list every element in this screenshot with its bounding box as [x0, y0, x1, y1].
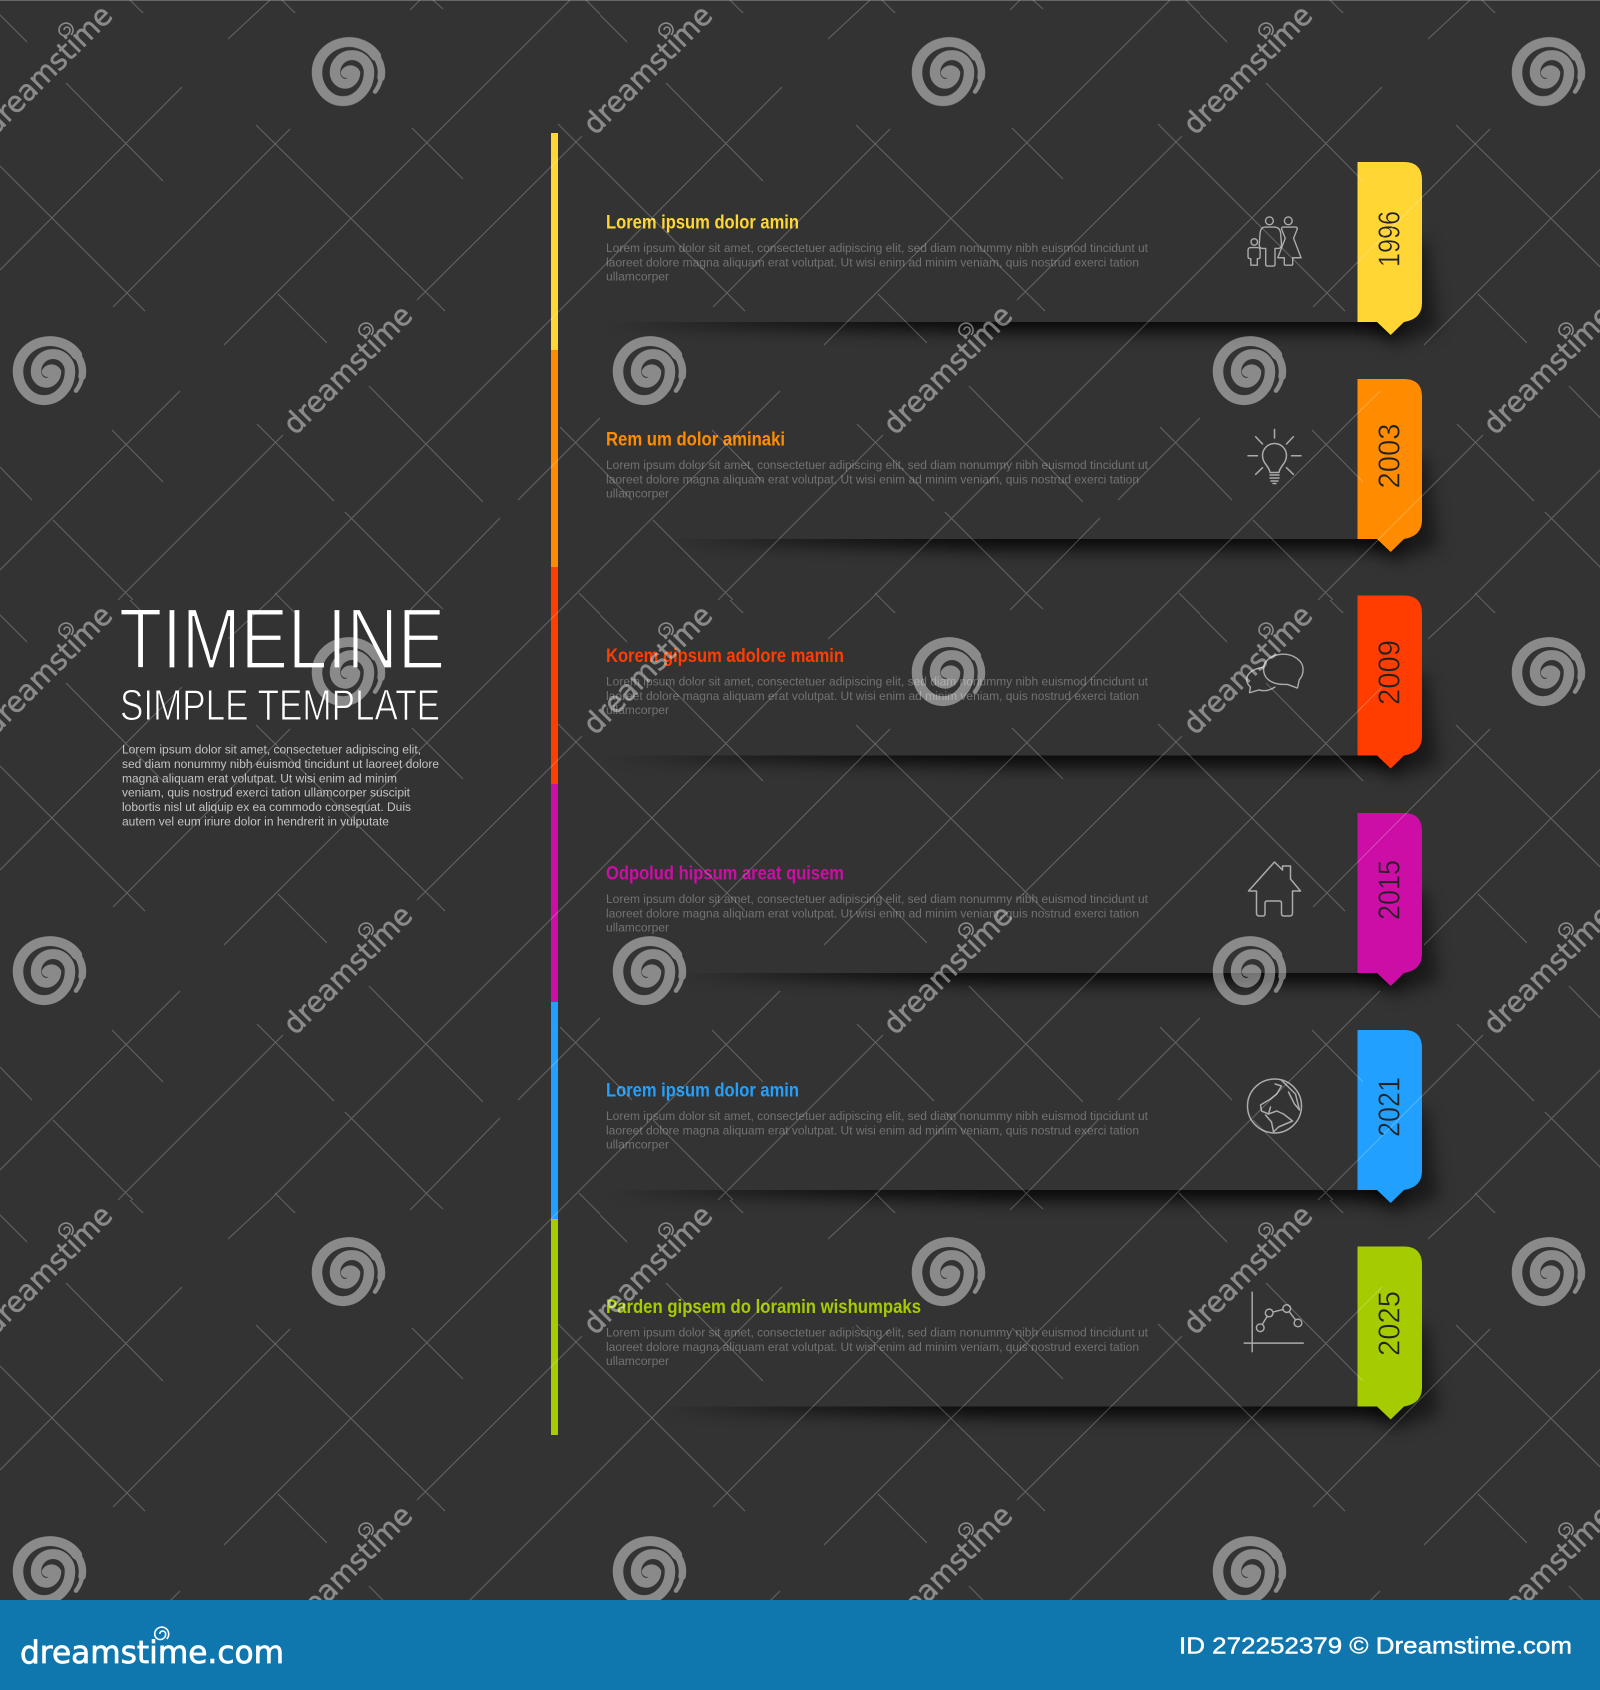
year: 2021: 2021 — [1372, 1077, 1406, 1137]
watermark overlay: dreamstime — [876, 1498, 1019, 1641]
intro text block — [122, 742, 439, 828]
footer logo: dreamstime.com — [20, 1635, 284, 1671]
tab: 2003 — [1358, 379, 1422, 552]
text block: 2009: laoreet dolore magna aliquam erat volutpat. Ut wisi enim ad minim veniam, quis nostrud exerci tation — [606, 689, 1139, 703]
text block: 2003: Lorem ipsum dolor sit amet, consectetuer adipiscing elit, sed diam nonummy nibh euismod tincidunt ut — [606, 458, 1149, 472]
heading: 2003: Rem um dolor aminaki — [606, 430, 785, 450]
year: 1996: 1996 — [1372, 211, 1406, 267]
timeline vertical bar — [551, 133, 558, 1435]
panel: 2003 — [606, 379, 1438, 561]
text block: 2015 — [606, 892, 1149, 935]
text block: 2021: ullamcorper — [606, 1138, 669, 1152]
watermark overlay: dreamstime — [876, 298, 1019, 441]
text block: 2009: Lorem ipsum dolor sit amet, consectetuer adipiscing elit, sed diam nonummy nibh euismod tincidunt ut — [606, 674, 1149, 688]
text block: 2025: laoreet dolore magna aliquam erat volutpat. Ut wisi enim ad minim veniam, quis nostrud exerci tation — [606, 1340, 1139, 1354]
text block: 2009: ullamcorper — [606, 703, 669, 717]
text block: 2015: Lorem ipsum dolor sit amet, consectetuer adipiscing elit, sed diam nonummy nibh euismod tincidunt ut — [606, 892, 1149, 906]
text block: 1996 — [606, 241, 1149, 284]
year: 2025: 2025 — [1372, 1291, 1406, 1356]
year: 2009: 2009 — [1372, 640, 1406, 705]
intro text block: sed diam nonummy nibh euismod tincidunt ut laoreet dolore — [122, 757, 439, 771]
icon: globe — [1248, 1079, 1302, 1133]
watermark overlay: dreamstime — [576, 598, 719, 741]
tab: 2015 — [1358, 813, 1422, 986]
icon: line chart — [1244, 1292, 1303, 1352]
title: TIMELINE — [119, 592, 445, 688]
text block: 2025: Lorem ipsum dolor sit amet, consectetuer adipiscing elit, sed diam nonummy nibh euismod tincidunt ut — [606, 1326, 1149, 1340]
subtitle: SIMPLE TEMPLATE — [120, 682, 440, 730]
text block: 2015: ullamcorper — [606, 921, 669, 935]
panel: 1996 — [606, 162, 1438, 344]
icon: family — [1248, 217, 1301, 266]
footer bar — [0, 1600, 1600, 1690]
panel: 2015 — [606, 813, 1438, 995]
text block: 2021: Lorem ipsum dolor sit amet, consectetuer adipiscing elit, sed diam nonummy nibh euismod tincidunt ut — [606, 1109, 1149, 1123]
tab: 2021 — [1358, 1030, 1422, 1203]
text block: 2003: laoreet dolore magna aliquam erat volutpat. Ut wisi enim ad minim veniam, quis nostrud exerci tation — [606, 472, 1139, 486]
watermark overlay: dreamstime — [876, 898, 1019, 1041]
watermark overlay: dreamstime — [276, 898, 419, 1041]
text block: 2003: ullamcorper — [606, 487, 669, 501]
icon: light bulb — [1248, 430, 1301, 484]
watermark overlay: dreamstime — [276, 298, 419, 441]
text block: 2025 — [606, 1326, 1149, 1368]
watermark overlay: dreamstime — [1176, 1198, 1319, 1341]
panel: 2009 — [606, 596, 1438, 778]
panel: 2021 — [606, 1030, 1438, 1212]
intro text block: lobortis nisl ut aliquip ex ea commodo consequat. Duis — [122, 800, 411, 814]
tab: 1996 — [1358, 162, 1422, 335]
watermark overlay: dreamstime — [1176, 598, 1319, 741]
year: 2003: 2003 — [1372, 424, 1406, 488]
icon: house — [1248, 862, 1300, 916]
text block: 2009 — [606, 674, 1149, 717]
text block: 2025: ullamcorper — [606, 1354, 669, 1368]
year: 2015: 2015 — [1372, 860, 1406, 920]
text block: 1996: laoreet dolore magna aliquam erat volutpat. Ut wisi enim ad minim veniam, quis nostrud exerci tation — [606, 255, 1139, 269]
panel: 2025 — [606, 1246, 1438, 1428]
intro text block: Lorem ipsum dolor sit amet, consectetuer adipiscing elit, — [122, 742, 421, 756]
watermark overlay: dreamstime — [576, 1198, 719, 1341]
heading: 2025: Parden gipsem do loramin wishumpaks — [606, 1297, 921, 1318]
intro text block: veniam, quis nostrud exerci tation ullamcorper suscipit — [122, 786, 411, 800]
tab: 2025 — [1358, 1246, 1422, 1420]
text block: 1996: Lorem ipsum dolor sit amet, consectetuer adipiscing elit, sed diam nonummy nibh euismod tincidunt ut — [606, 241, 1149, 255]
heading: 1996: Lorem ipsum dolor amin — [606, 212, 799, 234]
tab: 2009 — [1358, 596, 1422, 768]
text block: 2021 — [606, 1109, 1149, 1152]
text block: 2021: laoreet dolore magna aliquam erat volutpat. Ut wisi enim ad minim veniam, quis nostrud exerci tation — [606, 1123, 1139, 1137]
intro text block: autem vel eum iriure dolor in hendrerit in vulputate — [122, 814, 389, 828]
footer image id: ID 272252379 © Dreamstime.com — [1179, 1632, 1572, 1658]
heading: 2009: Korem gipsum adolore mamin — [606, 646, 844, 667]
intro text block: magna aliquam erat volutpat. Ut wisi enim ad minim — [122, 771, 397, 785]
icon: chat bubbles — [1247, 654, 1303, 693]
watermark overlay: dreamstime — [276, 1498, 419, 1641]
text block: 2015: laoreet dolore magna aliquam erat volutpat. Ut wisi enim ad minim veniam, quis nostrud exerci tation — [606, 906, 1139, 920]
text block: 1996: ullamcorper — [606, 270, 669, 284]
heading: 2015: Odpolud hipsum areat quisem — [606, 864, 844, 884]
text block: 2003 — [606, 458, 1149, 501]
heading: 2021: Lorem ipsum dolor amin — [606, 1080, 799, 1102]
